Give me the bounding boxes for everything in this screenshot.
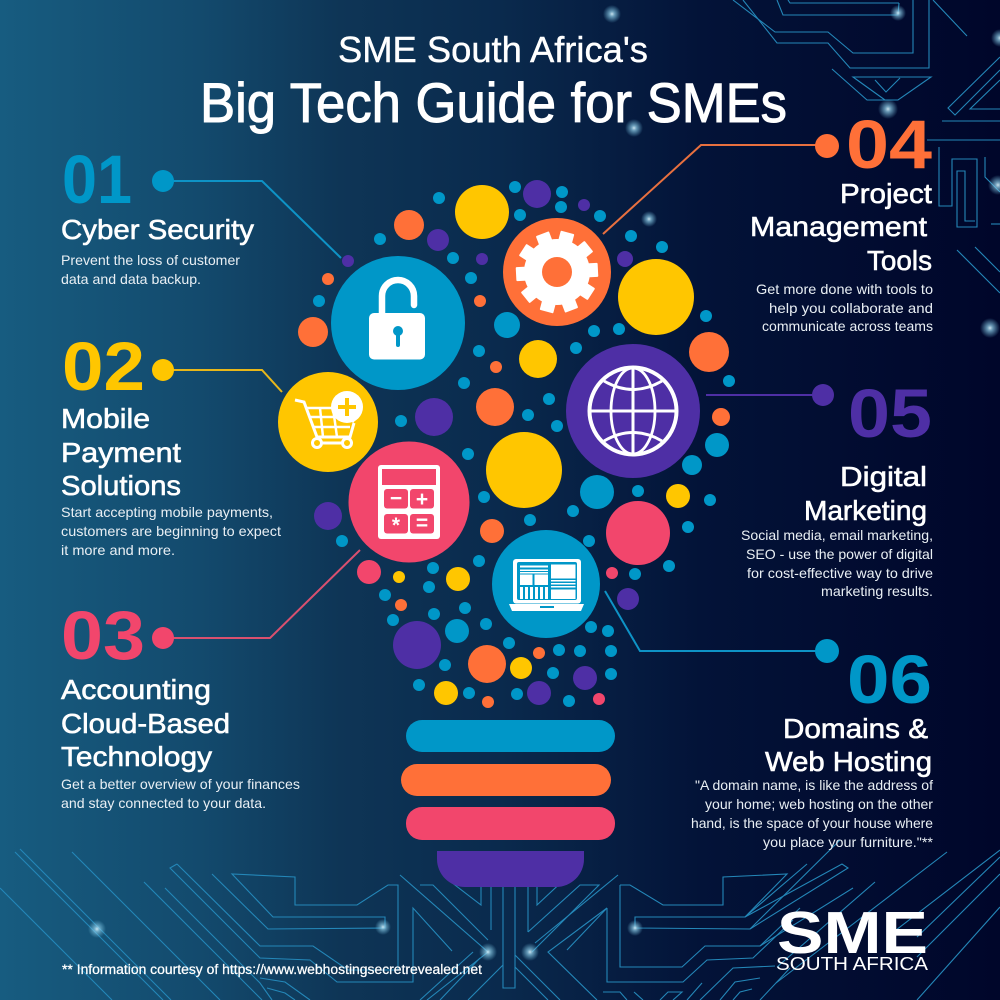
bulb base [401,720,615,887]
section 06 [691,641,934,850]
section 06: your home; web hosting on the other [705,797,933,812]
section 03: 03 [61,597,145,674]
section 02: Mobile [61,403,150,434]
section 03: Get a better overview of your finances [61,777,300,792]
bulb dots: pink [357,501,670,705]
footnote: ** Information courtesy of https://www.webhostingsecretrevealed.net [62,962,482,977]
section 04: Management [750,211,927,242]
section 05: marketing results. [821,584,933,599]
section 02: 02 [62,328,145,405]
section 06: 06 [847,641,932,718]
title: SME South Africa's [338,29,648,70]
section 05: Digital [840,461,927,492]
circuit pattern: top right [733,0,1000,293]
section 06: Domains & [783,713,928,744]
section 02: Payment [61,437,181,468]
bulb dots: orange [298,210,730,708]
section 06: hand, is the space of your house where [691,816,933,831]
section 01: data and data backup. [61,272,201,287]
section 05 [741,375,933,599]
section 01: Cyber Security [61,214,254,245]
section 02 [61,328,281,558]
section 06: you place your furniture."** [763,835,934,850]
circuit pattern: bottom [0,840,1000,1000]
section 02: Start accepting mobile payments, [61,505,273,520]
icon: calculator: − [390,487,402,510]
icon: calculator [348,442,470,562]
section 04 [750,106,933,334]
icon: padlock [331,256,465,390]
section 01 [61,141,254,287]
section 04: help you collaborate and [769,301,933,316]
section 02: customers are beginning to expect [61,524,281,539]
icon: laptop [492,530,600,638]
section 03: Technology [61,741,212,772]
section 02: Solutions [61,470,181,501]
section 03: and stay connected to your data. [61,796,266,811]
icon: shopping cart [278,372,378,472]
section 05: 05 [848,375,932,452]
title: Big Tech Guide for SMEs [200,71,787,134]
section 04: Tools [867,245,932,276]
bulb dots: yellow [393,185,694,705]
section 06: "A domain name, is like the address of [695,778,933,793]
section 04: communicate across teams [762,319,933,334]
icon: calculator: = [416,512,428,535]
logo: SME South Africa: SOUTH AFRICA [776,953,929,974]
section 01: 01 [62,141,132,218]
connector dots [152,134,839,663]
title [200,29,787,134]
section 05: SEO - use the power of digital [746,547,933,562]
section 04: Get more done with tools to [756,282,933,297]
section 04: 04 [846,106,932,183]
section 05: for cost-effective way to drive [747,566,933,581]
section 01: Prevent the loss of customer [61,253,240,268]
logo: SME South Africa: SME [777,900,928,966]
connector lines [163,145,827,651]
icon: globe [566,344,700,478]
bulb dots: purple [314,180,639,705]
section 05: Social media, email marketing, [741,528,933,543]
section 02: it more and more. [61,543,175,558]
section 03 [61,597,300,811]
icon: gear [503,218,611,326]
bulb dots: blue [313,181,735,707]
section 05: Marketing [804,495,927,526]
section 03: Accounting [61,674,211,705]
section 04: Project [840,178,932,209]
section 06: Web Hosting [765,746,932,777]
icon: calculator: * [392,514,401,537]
icon: calculator: + [416,488,428,511]
section 03: Cloud-Based [61,708,230,739]
